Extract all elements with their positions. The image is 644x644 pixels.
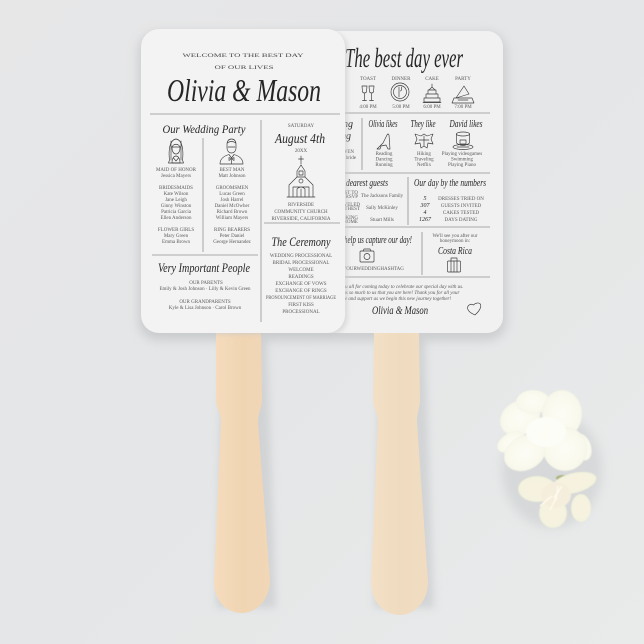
panel: date and venue: RIVERSIDE (288, 203, 314, 208)
section: day by the numbers: CAKES TESTED (443, 211, 479, 216)
back heading: The best day ever (345, 43, 463, 73)
divider lines (150, 114, 340, 322)
section: capture our day (340, 235, 412, 272)
bridal party names: Emma Brown (162, 240, 190, 245)
section: They like: Hiking (417, 152, 431, 157)
partial text: left section: ying (335, 119, 353, 130)
partial text: left section: WEN (343, 150, 354, 155)
icon: champagne glasses (362, 86, 374, 100)
groom party names: BEST MAN (219, 168, 245, 173)
panel: the ceremony: PRONOUNCEMENT OF MARRIAGE (266, 296, 336, 301)
fan: front side (141, 29, 345, 333)
wooden handle: left (214, 332, 270, 613)
partial text: left section: bride (346, 156, 357, 161)
timeline labels: CAKE (425, 77, 439, 82)
partial text: left section (335, 119, 357, 161)
section: David likes (442, 119, 483, 168)
icon: tea cup (453, 132, 473, 150)
partial text: left section: ng (341, 131, 351, 142)
thank you message (327, 285, 463, 317)
panel: the ceremony: PROCESSIONAL (282, 310, 320, 315)
welcome heading (182, 53, 304, 71)
section: dearest guests: LOOKING (335, 216, 358, 221)
panel: the ceremony (266, 234, 336, 315)
bridal party names (156, 168, 197, 245)
bridal party names: Ellen Anderson (161, 216, 192, 221)
panel: very important people: OUR GRANDPARENTS (179, 300, 231, 305)
icon: dinner plate (391, 83, 409, 101)
VIP heading: Very Important People (158, 260, 250, 275)
panel: the ceremony: WELCOME (288, 268, 314, 273)
groom party names: George Hernandez (213, 240, 252, 245)
bridal party names: Kate Wilson (164, 192, 189, 197)
section: day by the numbers: DAYS DATING (444, 218, 478, 223)
flower: lower (518, 468, 599, 528)
thank you message: Thank you all for coming today to celebrate our special day with us. (327, 285, 463, 290)
bridal party names: Ginny Winston (161, 204, 192, 209)
section: Olivia likes: Reading (376, 152, 393, 157)
fan: back side (298, 31, 503, 333)
section: They like: Netflix (417, 163, 432, 168)
section: David likes: Swimming (451, 158, 473, 162)
section: dearest guests (334, 178, 404, 225)
groom party names: Josh Harrel (221, 198, 244, 203)
groom party names: Richard Brown (217, 210, 248, 215)
icon: wedding cake (423, 84, 441, 102)
icon: bride (168, 139, 184, 163)
panel: date and venue: COMMUNITY CHURCH (274, 210, 328, 215)
front card (141, 29, 345, 333)
groom party names: Peter Daniel (220, 234, 245, 239)
welcome heading: WELCOME TO THE BEST DAY (182, 53, 304, 59)
icon: camera (360, 249, 374, 262)
wooden handle: right (371, 332, 428, 615)
panel: date and venue: 20XX (295, 149, 307, 154)
icon: suitcase (448, 258, 460, 272)
icon: gramophone (452, 86, 474, 103)
panel: wedding party (156, 122, 252, 245)
bridal party names: FLOWER GIRLS (158, 228, 194, 233)
section: dearest guests: Sally McKinley (366, 206, 398, 211)
divider lines (345, 113, 490, 277)
section: dearest guests: dearest guests (346, 178, 388, 189)
panel: date and venue: RIVERSIDE, CALIFORNIA (272, 217, 331, 222)
section: dearest guests: Stuart Mills (370, 218, 394, 223)
icon: groom (220, 139, 243, 164)
section: dearest guests: RSVP (345, 195, 358, 200)
section: day by the numbers: DRESSES TRIED ON (438, 197, 484, 202)
flower shadow (502, 412, 602, 528)
timeline labels: 5:00 PM (392, 105, 410, 110)
panel: date and venue: SATURDAY (288, 124, 314, 129)
flower stamens (537, 424, 562, 510)
panel: very important people: OUR PARENTS (189, 281, 223, 286)
section: Olivia likes: Olivia likes (368, 119, 398, 130)
bridal party names: Mary Green (164, 234, 189, 239)
panel: the ceremony: WEDDING PROCESSIONAL (270, 254, 332, 259)
section: capture our day: help us capture our day! (344, 235, 412, 246)
section: Olivia likes (368, 119, 398, 168)
thank you message: love and support as we begin this new journey together! (339, 297, 452, 302)
bridal party names: BRIDESMAIDS (159, 186, 193, 191)
bridal party names: Patricia Garcia (161, 210, 192, 215)
section: honeymoon (433, 234, 478, 272)
section: day by the numbers (414, 178, 486, 223)
section: honeymoon: honeymoon in: (440, 239, 470, 244)
date: August 4th (274, 132, 325, 147)
groom party names: RING BEARERS (214, 228, 250, 233)
timeline labels: 4:00 PM (359, 105, 377, 110)
section: dearest guests: HOME (343, 220, 358, 225)
flowers (493, 390, 602, 528)
timeline labels: DINNER (392, 77, 411, 82)
bridal party names: MAID OF HONOR (156, 168, 197, 173)
fan shadows (138, 32, 507, 608)
groom party names: Lucas Green (219, 192, 245, 197)
section: dearest guests: FARTHEST (335, 207, 360, 212)
ceremony heading: The Ceremony (272, 234, 331, 249)
section: dearest guests: TRAVELED (334, 203, 360, 208)
panel: very important people (158, 260, 251, 311)
timeline labels: 6:00 PM (423, 105, 441, 110)
icon: church (287, 156, 315, 197)
front card shadow (143, 31, 348, 335)
back card (298, 31, 503, 333)
section: David likes: Playing Piano (448, 163, 476, 168)
panel: the ceremony: READINGS (288, 275, 314, 280)
section: David likes: David likes (449, 119, 483, 130)
section: David likes: Playing videogames (442, 152, 482, 157)
timeline labels: PARTY (455, 77, 471, 82)
section: Olivia likes: Running (375, 163, 393, 168)
bridal party names: Jessica Mayers (161, 174, 191, 179)
groom party names: William Mayers (216, 216, 248, 221)
timeline labels: TOAST (360, 77, 376, 82)
section: They like: Traveling (414, 158, 434, 162)
groom party names: GROOMSMEN (216, 186, 249, 191)
section: dearest guests: LAST TO (338, 191, 358, 196)
section: They like (410, 119, 436, 168)
panel: the ceremony: BRIDAL PROCESSIONAL (273, 261, 329, 266)
groom party names: Daniel McOwher (215, 204, 250, 209)
section: day by the numbers: 1267 (419, 217, 432, 223)
section: They like: They like (410, 119, 436, 130)
thank you message: It means so much to us that you are here! Thank you for all your (330, 291, 459, 296)
section: day by the numbers: Our day by the numbers (414, 178, 486, 189)
panel: date and venue (272, 124, 331, 222)
groom party names: Matt Johnson (218, 174, 246, 179)
back signature: Olivia & Mason (372, 303, 428, 317)
welcome heading: OF OUR LIVES (214, 65, 274, 71)
timeline labels (359, 77, 472, 110)
wedding party heading: Our Wedding Party (162, 122, 246, 136)
icon: heart (467, 303, 482, 316)
section: day by the numbers: 307 (420, 203, 430, 209)
bridal party names: Jane Leigh (165, 198, 187, 203)
couple names: Olivia & Mason (167, 72, 321, 108)
icon: hearts and leaves (415, 134, 433, 148)
section: day by the numbers: 4 (424, 209, 426, 216)
groom party names (213, 168, 252, 245)
section: day by the numbers: 5 (424, 196, 426, 202)
section: capture our day: #YOURWEDDINGHASHTAG (340, 267, 404, 272)
flower: upper (493, 390, 595, 478)
panel: the ceremony: EXCHANGE OF VOWS (275, 282, 327, 287)
panel: very important people: Emily & Josh Johnson · Lilly & Kevin Green (159, 287, 251, 292)
icon: high heel shoe (377, 134, 390, 149)
section: dearest guests: The Jacksons Family (361, 194, 404, 199)
section: honeymoon: We'll see you after our (433, 234, 478, 239)
section: Olivia likes: Dancing (376, 158, 393, 162)
section: honeymoon: Costa Rica (438, 246, 472, 257)
panel: the ceremony: EXCHANGE OF RINGS (275, 289, 327, 294)
panel: the ceremony: FIRST KISS (288, 303, 314, 308)
timeline labels: 7:00 PM (454, 105, 472, 110)
section: day by the numbers: GUESTS INVITED (441, 204, 482, 209)
panel: very important people: Kyle & Lisa Johnson · Carol Brown (169, 306, 242, 311)
